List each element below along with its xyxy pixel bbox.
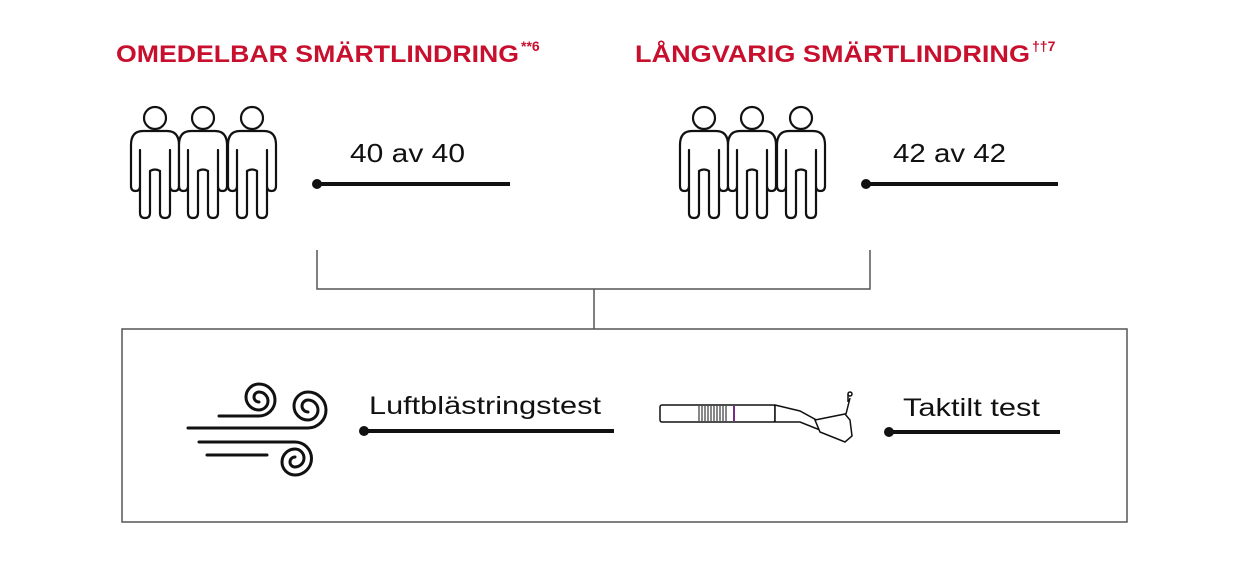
text block: tactile test: Taktilt test (903, 394, 1040, 422)
text block: air blast test: Luftblästringstest (369, 392, 601, 420)
stat: 42 av 42 (861, 138, 1058, 189)
text block: tactile test (884, 394, 1060, 437)
icon: people group right (680, 107, 825, 218)
icon: people group left (131, 107, 276, 218)
title: immediate pain relief: **6 (521, 38, 540, 54)
panel: tests (122, 329, 1127, 522)
stat: 40 av 40 (312, 138, 510, 189)
stat: 42 av 42: 42 av 42 (893, 138, 1006, 168)
title: long-lasting pain relief: ††7 (1032, 38, 1056, 54)
icon: wind (188, 384, 326, 475)
icon: dental instrument (660, 392, 852, 442)
title: long-lasting pain relief: LÅNGVARIG SMÄRTLINDRING (635, 40, 1030, 68)
text block: air blast test (359, 392, 614, 436)
stat: 40 av 40: 40 av 40 (350, 138, 465, 168)
title: immediate pain relief: OMEDELBAR SMÄRTLINDRING (116, 41, 519, 68)
connector bracket (317, 250, 870, 329)
